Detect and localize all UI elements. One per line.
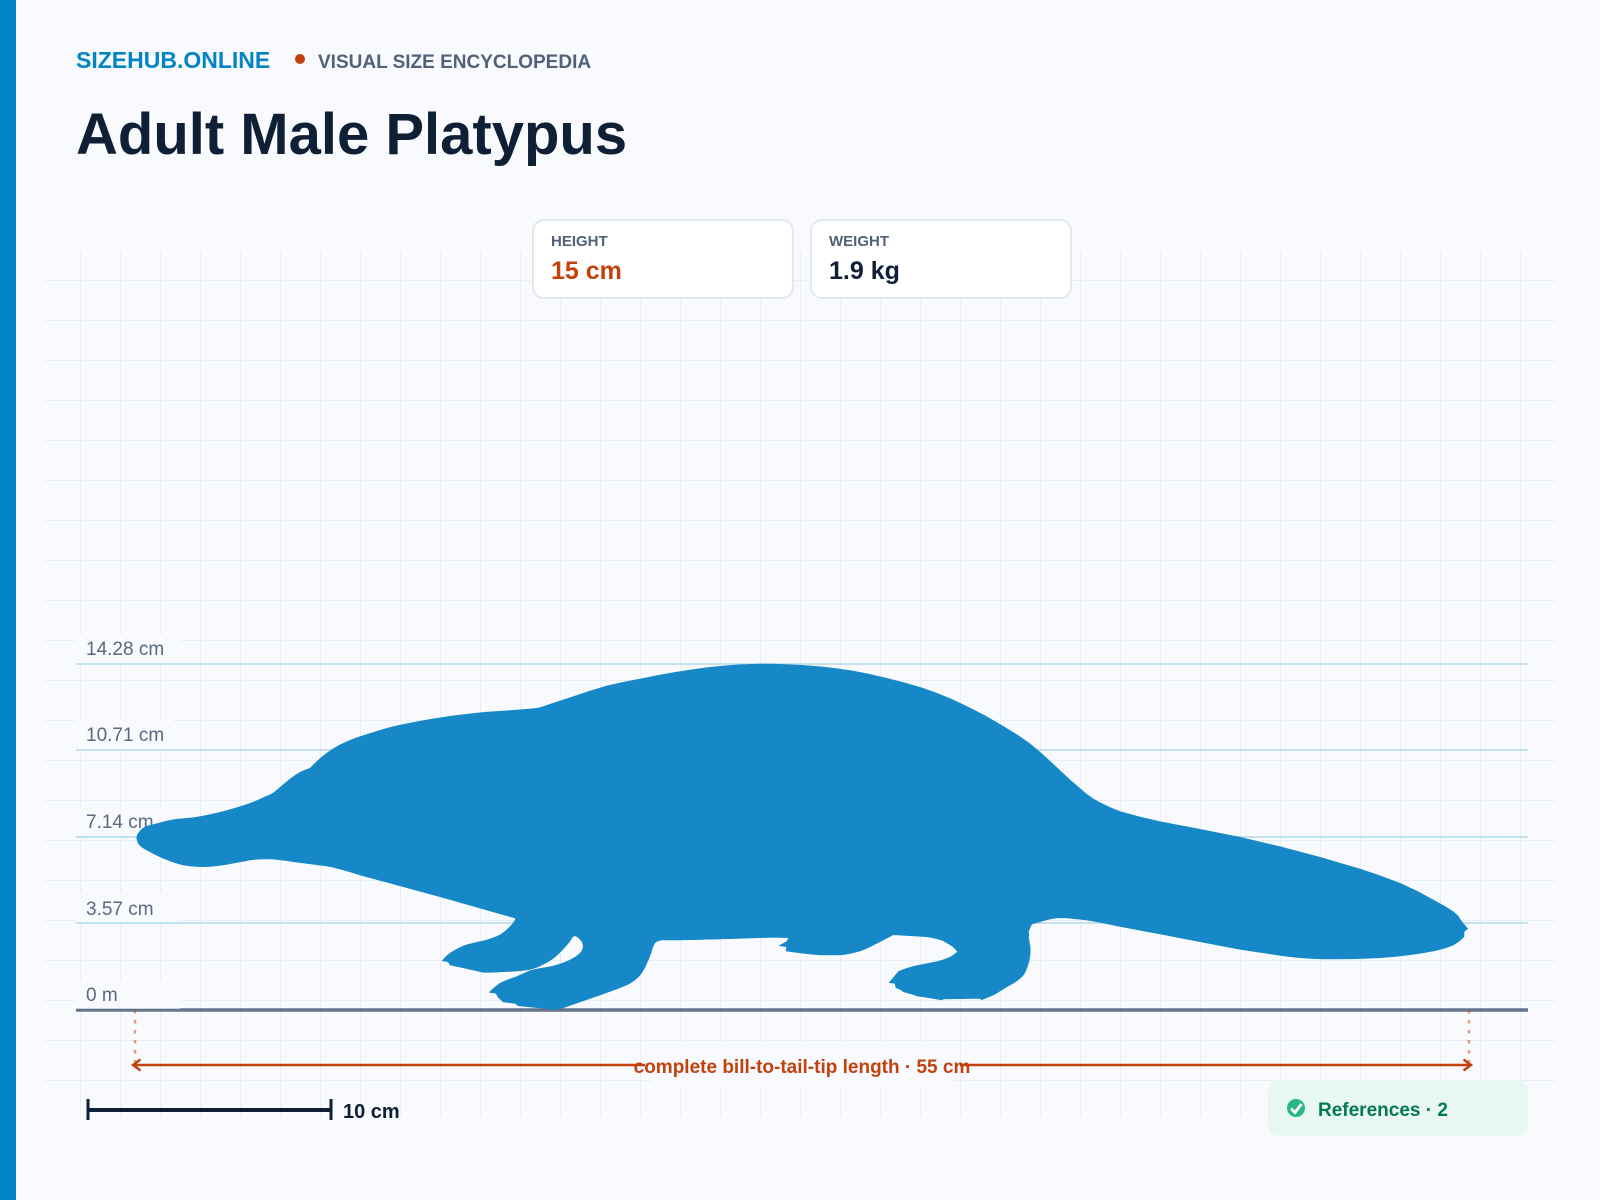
label 3.57 cm bbox=[76, 893, 178, 922]
references badge: References · 2 bbox=[1318, 1100, 1448, 1121]
accent bar bbox=[0, 0, 16, 1200]
label 3.57 cm: 3.57 cm bbox=[86, 899, 154, 920]
height reference lines bbox=[76, 664, 1528, 923]
height card bbox=[533, 220, 793, 298]
label 10.71 cm: 10.71 cm bbox=[86, 725, 164, 746]
label 10.71 cm bbox=[76, 720, 173, 749]
label 7.14 cm: 7.14 cm bbox=[86, 812, 154, 833]
weight card: WEIGHT bbox=[829, 233, 889, 250]
label 7.14 cm bbox=[76, 807, 173, 836]
tagline: VISUAL SIZE ENCYCLOPEDIA bbox=[318, 52, 591, 73]
length annotation bbox=[133, 1010, 1471, 1087]
weight card: 1.9 kg bbox=[829, 257, 900, 285]
length label: complete bill-to-tail-tip length · 55 cm bbox=[634, 1057, 970, 1078]
ground line bbox=[76, 1008, 1528, 1012]
length label backing bbox=[645, 1043, 960, 1087]
height axis labels bbox=[76, 635, 180, 1009]
weight card bbox=[811, 220, 1071, 298]
label 0 m bbox=[76, 980, 180, 1009]
background grid bbox=[44, 252, 1556, 1116]
brand name: SIZEHUB.ONLINE bbox=[76, 47, 270, 73]
title: Adult Male Platypus bbox=[76, 102, 627, 167]
scale bar bbox=[88, 1099, 400, 1123]
left extension line bbox=[134, 1010, 136, 1062]
right extension line bbox=[1468, 1010, 1470, 1062]
icon: check bbox=[1287, 1099, 1305, 1117]
length arrow bbox=[133, 1060, 1471, 1070]
label 0 m: 0 m bbox=[86, 985, 118, 1006]
brand dot bbox=[295, 54, 305, 64]
label 14.28 cm bbox=[76, 635, 180, 663]
scale bar: 10 cm bbox=[343, 1101, 400, 1123]
references badge bbox=[1268, 1080, 1528, 1136]
height card: HEIGHT bbox=[551, 233, 608, 250]
height card: 15 cm bbox=[551, 257, 622, 285]
header brand line bbox=[76, 47, 591, 73]
platypus silhouette bbox=[137, 664, 1468, 1010]
label 14.28 cm: 14.28 cm bbox=[86, 639, 164, 660]
